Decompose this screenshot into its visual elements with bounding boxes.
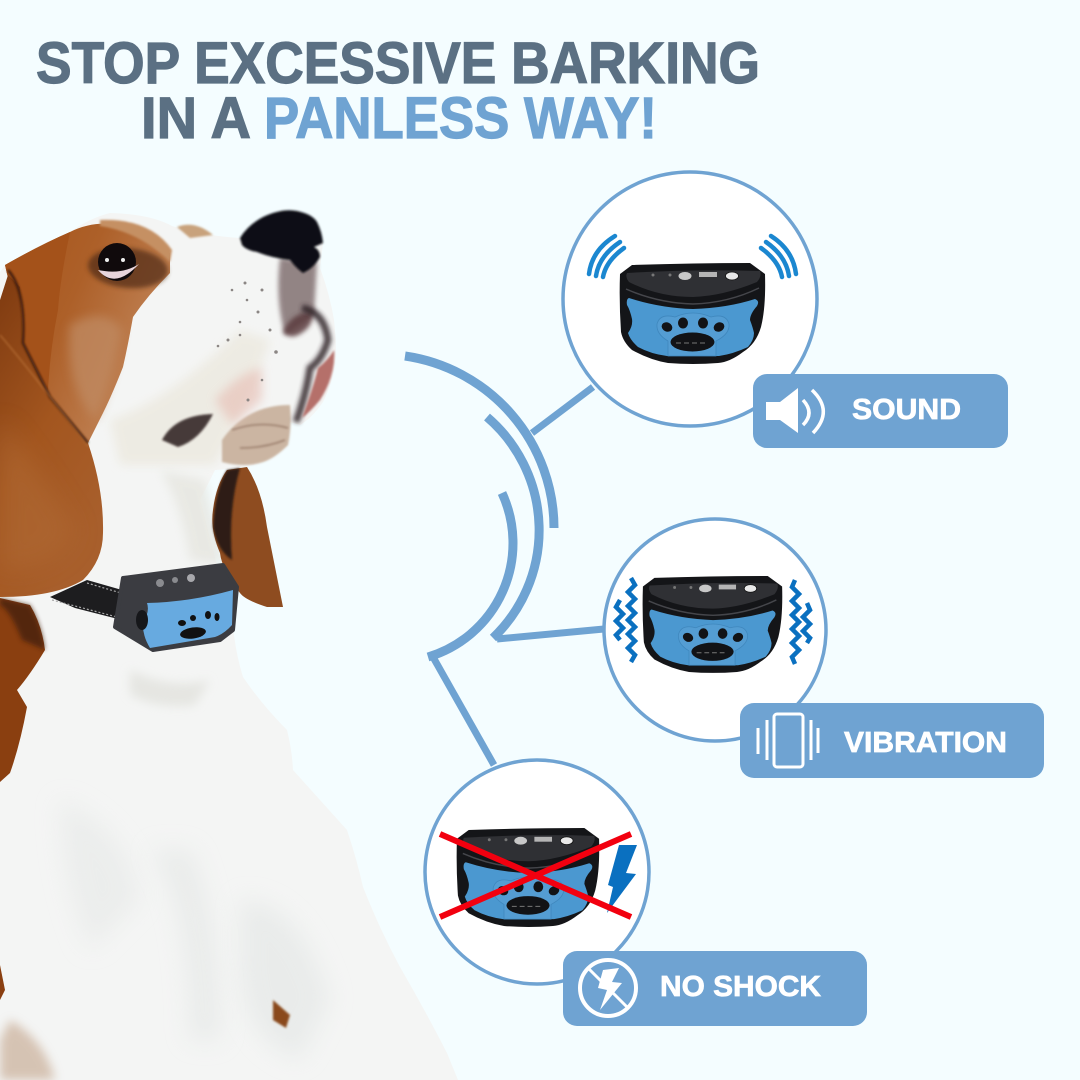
title: [36, 31, 760, 151]
panel: sound circle: [563, 172, 817, 426]
label: vibration: [740, 703, 1044, 778]
icon: vibrating phone: [758, 714, 818, 767]
collar: no shock: [457, 828, 599, 927]
collar: sound: [620, 263, 765, 364]
label: sound: [753, 374, 1008, 448]
dog: far ear: [212, 467, 283, 607]
icon: blue lightning bolt: [607, 845, 637, 913]
dog: eye: [86, 243, 170, 291]
icon: red cross: [440, 834, 631, 917]
label: sound: SOUND: [852, 394, 961, 426]
title: IN A: [141, 86, 251, 151]
panel: vibration circle: [604, 519, 826, 741]
title: PANLESS WAY!: [264, 86, 657, 151]
label: no shock: NO SHOCK: [660, 971, 821, 1003]
dog: muzzle shading: [162, 258, 334, 465]
dog illustration: [0, 210, 458, 1080]
dog: nose: [240, 210, 323, 273]
collar: vibration: [643, 576, 782, 673]
panel: no shock circle: [425, 760, 649, 984]
dog: near ear: [0, 270, 103, 597]
icon: vibration zigzags: [616, 578, 810, 664]
icon: speaker: [766, 388, 823, 433]
connector arcs and lines: [405, 356, 604, 765]
dog: collar strap: [50, 580, 122, 619]
icon: no shock: [580, 960, 636, 1016]
dog: chest brown patch: [0, 598, 290, 1080]
label: vibration: VIBRATION: [844, 727, 1007, 759]
icon: sound waves: [589, 236, 796, 277]
dog: collar device: [115, 565, 237, 650]
title: STOP EXCESSIVE BARKING: [36, 31, 760, 96]
label: no shock: [563, 951, 867, 1026]
dog: face mask: [5, 220, 213, 443]
